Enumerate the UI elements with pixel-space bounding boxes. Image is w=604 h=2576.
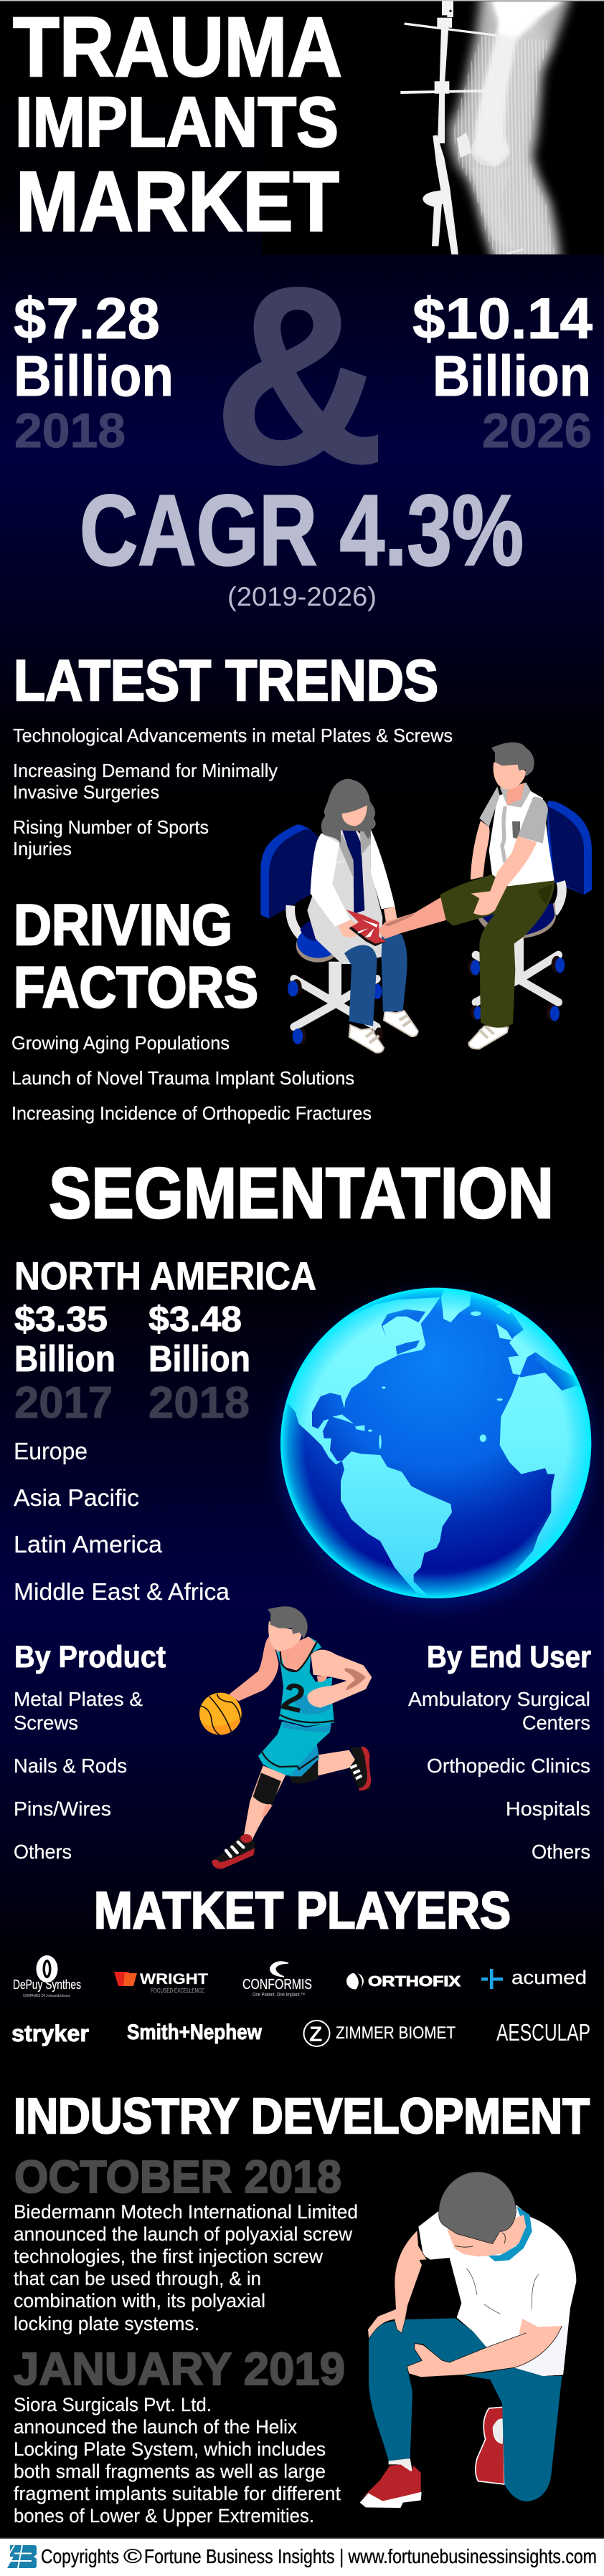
north america value 2018 [148,1300,250,1428]
logo: Wright: FOCUSED EXCELLENCE [151,1988,204,1994]
title: IMPLANTS [15,82,339,161]
north america value 2017: Billion [14,1338,115,1379]
doctor [307,779,418,1053]
back shoe [476,2407,504,2484]
heading: latest trends: LATEST TRENDS [14,649,438,713]
north america value 2018: $3.48 [148,1300,242,1339]
logo: Acumed: acumed [511,1967,587,1988]
shirt [418,2205,576,2376]
north america value 2017: 2017 [14,1378,113,1428]
trends list: Increasing Demand for Minimally [13,760,278,781]
market value 2026: Billion [433,344,591,408]
regions list: Europe [14,1438,88,1464]
neck and collar [447,2206,532,2261]
shorts [258,1722,331,1776]
north america value 2017 [14,1300,115,1428]
regions list: Asia Pacific [14,1484,139,1511]
description: that can be used through, & in [14,2268,261,2289]
regions list: Middle East & Africa [14,1578,230,1605]
CAGR callout: (2019-2026) [227,582,377,611]
front leg [244,1765,286,1842]
title: TRAUMA [13,0,342,95]
illustration: kneeling man holding knee [360,2172,576,2508]
panel: by product [14,1640,166,1863]
jersey [277,1636,334,1726]
end user list [408,1688,590,1863]
date: October 2018: OCTOBER 2018 [14,2151,341,2203]
logo: Stryker: stryker [11,2021,89,2046]
head [268,1606,308,1651]
panel: footer [0,2537,604,2576]
copyright text: © [123,2545,142,2567]
copyright text: Copyrights [41,2545,119,2567]
heading: driving factors: FACTORS [14,955,258,1020]
product list: Screws [14,1712,78,1734]
market value 2018: Billion [14,344,174,408]
panel: latest trends [13,649,453,859]
product list: Nails & Rods [14,1755,127,1777]
heading: driving factors [14,893,258,1020]
trends list: Injuries [13,838,72,859]
front shoe [212,1834,255,1869]
end user list: Others [532,1841,590,1863]
trends list: Rising Number of Sports [13,816,209,838]
logo: DePuy Synthes [13,1955,81,1998]
logo: Wright: WRIGHT [140,1971,208,1988]
end user list: Centers [522,1712,590,1734]
north america value 2018: 2018 [148,1378,250,1428]
regions list [14,1438,230,1605]
ball [199,1693,242,1735]
driving factors list: Growing Aging Populations [11,1032,230,1054]
description: locking plate systems. [14,2313,199,2334]
end user list: Ambulatory Surgical [408,1688,590,1710]
panel: knee x-ray with external fixator [262,0,604,263]
jersey: 2 [278,1673,309,1722]
logo: Zimmer Biomet: Z [309,2023,322,2046]
heading: driving factors: DRIVING [14,893,232,958]
description: fragment implants suitable for different [14,2483,341,2504]
logo: Wright [114,1971,208,1994]
driving factors list: Increasing Incidence of Orthopedic Fractures [11,1102,372,1124]
market value 2026: 2026 [482,404,592,458]
front shoe [360,2458,422,2508]
logo: Acumed [481,1967,587,1989]
description: combination with, its polyaxial [14,2290,265,2312]
description: Siora Surgicals Pvt. Ltd. [14,2394,212,2415]
right chair [468,801,592,1021]
external fixator rods and pins [400,1,504,254]
panel: company logos [11,1955,590,2046]
description [14,2201,358,2334]
driving factors list [11,1032,372,1124]
panel: development January 2019 [14,2343,345,2527]
description: technologies, the first injection screw [14,2246,323,2267]
panel: by end user [408,1640,591,1863]
trends list: Invasive Surgeries [13,781,159,803]
market value 2018 [14,287,174,458]
panel: driving factors [11,893,372,1124]
market value 2026: $10.14 [412,287,593,351]
icon: globe [278,1288,604,1608]
description: announced the launch of the Helix [14,2416,297,2438]
logo: Conformis: One Patient. One Implant.™ [253,1993,305,1998]
end user list: Orthopedic Clinics [427,1755,590,1777]
market value 2018: $7.28 [14,287,160,351]
market value 2026 [412,287,593,458]
title [13,0,342,249]
rear shoe [349,1747,371,1790]
front arm [307,1650,372,1708]
product list: Metal Plates & [14,1688,143,1710]
north america value 2018: Billion [148,1338,250,1379]
logo: DePuy Synthes: COMPANIES OF Johnson&Johnson [23,1994,70,1998]
illustration: doctor examining patient's leg [260,743,592,1053]
left chair [260,824,383,1044]
regions list: Latin America [14,1531,163,1557]
logo: Orthofix [346,1972,461,1990]
panel: development October 2018 [14,2151,358,2334]
hair [439,2172,516,2244]
description: announced the launch of polyaxial screw [14,2223,352,2245]
patient [346,743,555,1049]
heading: by product: By Product [14,1640,166,1674]
description: bones of Lower & Upper Extremities. [14,2505,314,2527]
illustration: basketball player [199,1606,372,1869]
logo: Zimmer Biomet: ZIMMER BIOMET [336,2023,456,2043]
heading: market players: MATKET PLAYERS [94,1882,511,1940]
icon: Fortune Business Insights logo [7,2545,37,2568]
logo: Conformis [242,1962,312,1998]
description: both small fragments as well as large [14,2461,326,2482]
description [14,2394,341,2527]
logo: Smith+Nephew: Smith+Nephew [127,2021,263,2044]
product list: Others [14,1841,72,1863]
north america heading: NORTH AMERICA [14,1254,316,1298]
market value 2018: 2018 [14,404,126,458]
date: January 2019: JANUARY 2019 [14,2343,345,2395]
trends list: Technological Advancements in metal Plates & Screws [13,725,453,746]
north america value 2017: $3.35 [14,1300,108,1339]
ampersand graphic: & [214,234,384,516]
driving factors list: Launch of Novel Trauma Implant Solutions [11,1067,354,1089]
heading: segmentation: SEGMENTATION [49,1153,554,1234]
title: MARKET [16,154,339,249]
logo: Conformis: CONFORMIS [242,1977,312,1993]
trends list [13,725,453,859]
pants [369,2318,562,2501]
description: Biedermann Motech International Limited [14,2201,358,2223]
logo: Orthofix: ORTHOFIX [368,1974,461,1990]
panel: regional segmentation [14,1254,316,1605]
description: Locking Plate System, which includes [14,2438,326,2460]
end user list: Hospitals [506,1798,590,1820]
product list [14,1688,143,1863]
product list: Pins/Wires [14,1798,111,1820]
logo: DePuy Synthes: DePuy Synthes [13,1978,81,1992]
logo: Zimmer Biomet [304,2021,456,2046]
arms [368,2231,562,2377]
